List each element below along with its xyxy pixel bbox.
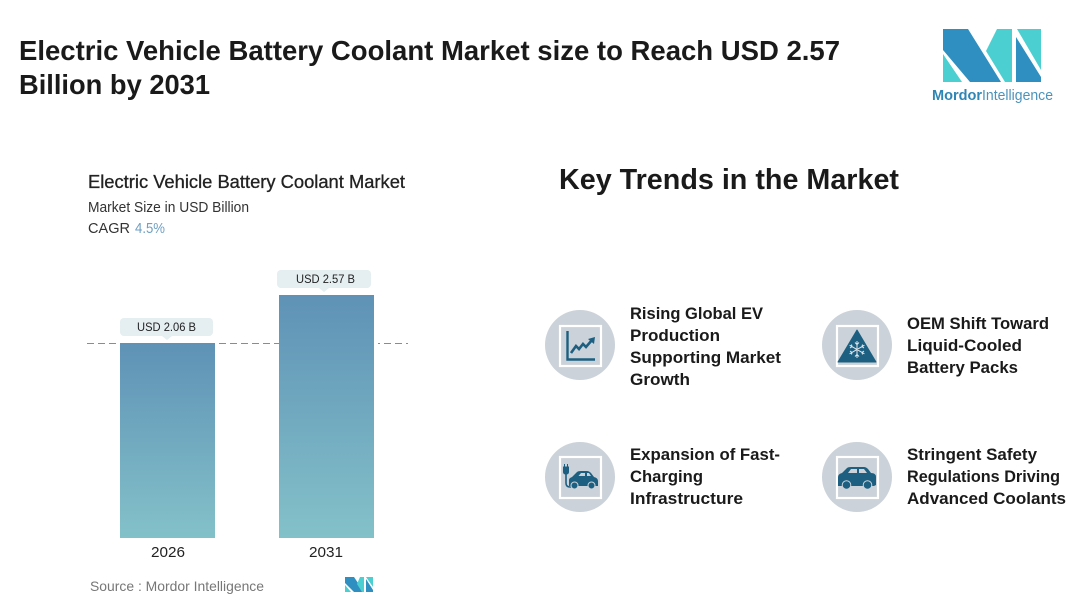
chart heading: Market Size in USD Billion [88, 200, 249, 216]
icon: snowflake triangle [822, 310, 892, 380]
text: Advanced Coolants [907, 489, 1066, 508]
title [19, 35, 840, 100]
logo: Mordor Intelligence: Intelligence [982, 88, 1053, 104]
text: OEM Shift Toward [907, 314, 1049, 333]
chart heading [88, 172, 405, 237]
trend: fast charging [545, 442, 780, 512]
icon: plug-in car [545, 442, 615, 512]
chart heading: CAGR [88, 221, 130, 237]
small logo [345, 577, 373, 592]
text: Supporting Market [630, 348, 781, 367]
text: Regulations Driving [907, 467, 1060, 486]
trend: safety regulations [822, 442, 1066, 512]
text: Infrastructure [630, 489, 743, 508]
text [907, 314, 1049, 377]
icon: car [822, 442, 892, 512]
text: Liquid-Cooled [907, 336, 1022, 355]
bar chart: USD 2.06 B [137, 320, 196, 334]
icon: growth chart [545, 310, 615, 380]
chart heading: Electric Vehicle Battery Coolant Market [88, 172, 405, 192]
trend: rising production [545, 304, 781, 389]
title: Billion by 2031 [19, 69, 210, 100]
text [630, 304, 781, 389]
bar chart: 2031 [309, 544, 343, 561]
bar chart: USD 2.57 B [296, 272, 355, 286]
source line: Source : Mordor Intelligence [90, 578, 264, 594]
trend: OEM shift [822, 310, 1049, 380]
text: Charging [630, 467, 703, 486]
heading: key trends: Key Trends in the Market [559, 164, 899, 196]
text: Battery Packs [907, 358, 1018, 377]
text: Expansion of Fast- [630, 445, 780, 464]
text: Stringent Safety [907, 445, 1038, 464]
bar chart [87, 270, 408, 561]
logo: Mordor Intelligence [932, 29, 1053, 104]
text: Growth [630, 370, 690, 389]
text: Production [630, 326, 720, 345]
title: Electric Vehicle Battery Coolant Market size to Reach USD 2.57 [19, 35, 840, 66]
text: Rising Global EV [630, 304, 764, 323]
logo: Mordor Intelligence: Mordor [932, 88, 982, 104]
chart heading: 4.5% [135, 221, 165, 237]
text [630, 445, 780, 508]
bar chart: 2026 [151, 544, 185, 561]
text [907, 445, 1066, 508]
